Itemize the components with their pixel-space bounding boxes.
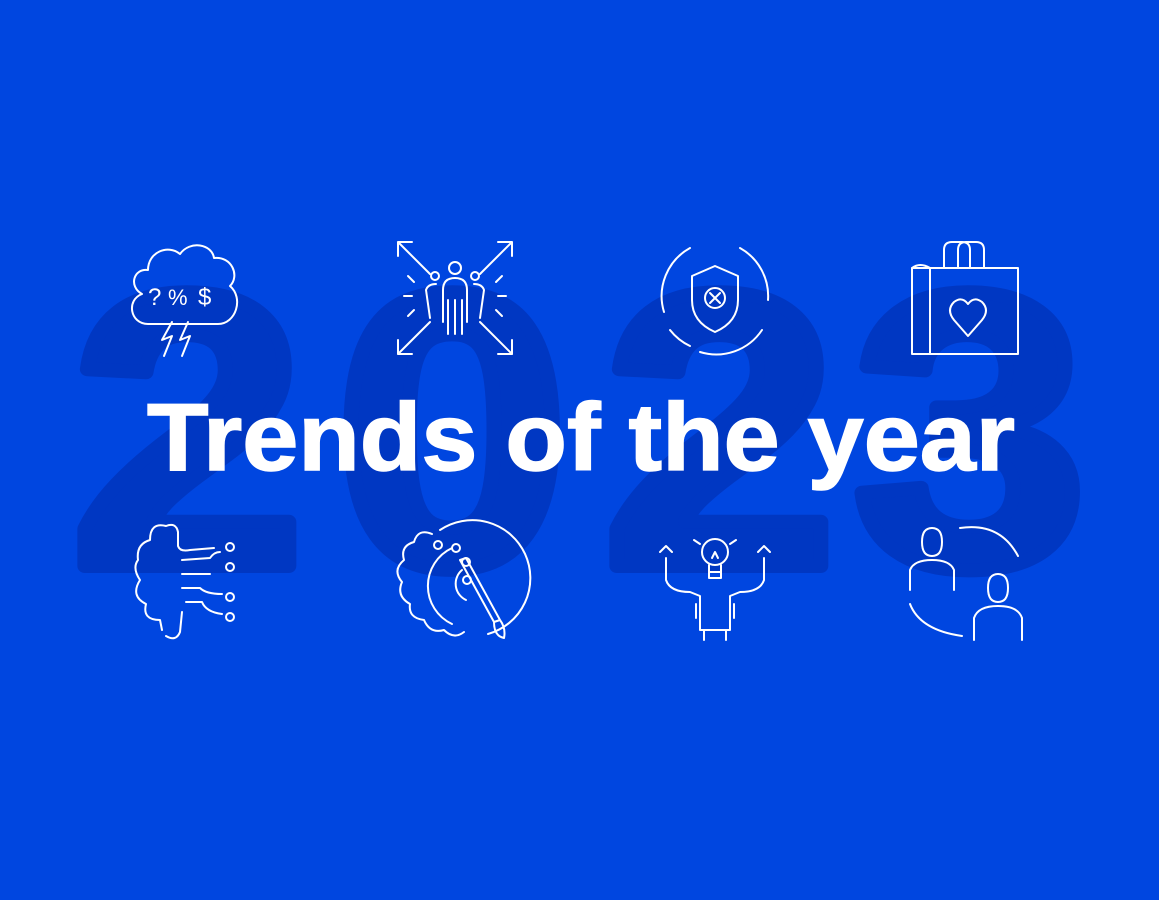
icon: shopping bag with heart bbox=[912, 242, 1018, 354]
icon: storm cloud with ?%$: % bbox=[168, 285, 188, 310]
icon: storm cloud with ?%$: ? bbox=[148, 284, 161, 311]
background year 2023 bbox=[70, 212, 1088, 650]
background year 2023: 2 bbox=[70, 212, 306, 650]
icon: people exchange bbox=[910, 527, 1022, 640]
icon: team with arrows bbox=[398, 242, 512, 354]
icon: shield with refresh circle bbox=[662, 248, 768, 354]
background year 2023: 2 bbox=[602, 212, 838, 650]
icon: person with lightbulb bbox=[660, 539, 770, 640]
icon: brain circuit bbox=[135, 525, 234, 638]
background year 2023: 3 bbox=[852, 212, 1088, 650]
icon: storm cloud with ?%$ bbox=[132, 245, 237, 356]
background year 2023: 0 bbox=[334, 212, 570, 650]
title: Trends of the year bbox=[147, 384, 1015, 491]
icon: storm cloud with ?%$: $ bbox=[198, 284, 211, 311]
icon: gear with palette and brush bbox=[397, 520, 530, 638]
